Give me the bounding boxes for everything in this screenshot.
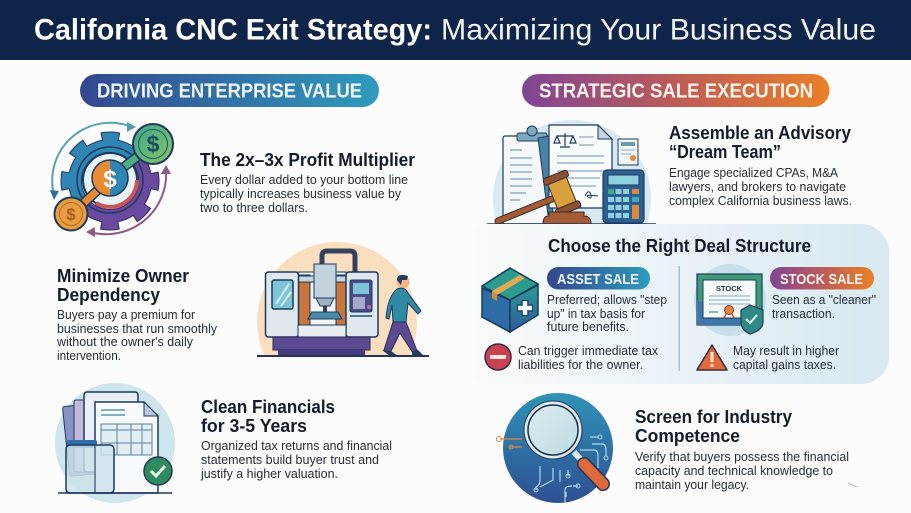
icon: gear with dollar coins: $ bbox=[147, 131, 160, 157]
text block: profit multiplier: The 2x–3x Profit Multiplier bbox=[200, 149, 415, 170]
icon: gear with dollar coins bbox=[50, 122, 173, 237]
icon: magnifying glass over circuit bbox=[496, 393, 613, 503]
text: asset sale drawback bbox=[518, 344, 659, 372]
text block: screen for industry competence: Verify that buyers possess the financial bbox=[635, 450, 849, 464]
text block: profit multiplier bbox=[200, 149, 415, 215]
section heading: driving enterprise value bbox=[80, 74, 379, 107]
text: stock sale drawback bbox=[733, 344, 839, 372]
panel: deal structure bbox=[458, 224, 889, 384]
section heading: strategic sale execution: STRATEGIC SALE EXECUTION bbox=[539, 80, 813, 102]
text block: clean financials bbox=[200, 396, 392, 481]
text: asset sale benefit bbox=[547, 293, 667, 334]
text block: minimize owner dependency: Buyers pay a premium for bbox=[57, 308, 195, 322]
label: stock sale bbox=[770, 267, 874, 290]
text block: clean financials: Clean Financials bbox=[201, 396, 335, 417]
icon: warning triangle bbox=[697, 345, 727, 370]
text block: minimize owner dependency: intervention. bbox=[57, 349, 121, 363]
text block: advisory dream team: “Dream Team” bbox=[669, 141, 781, 162]
text block: clean financials: for 3-5 Years bbox=[201, 415, 307, 436]
icon: minus circle bbox=[485, 344, 511, 370]
heading: choose the right deal structure: Choose the Right Deal Structure bbox=[548, 235, 811, 256]
icon: CNC machine with person walking away bbox=[257, 242, 429, 357]
icon: gear with dollar coins: $ bbox=[66, 205, 76, 224]
subtitle: Maximizing Your Business Value bbox=[441, 14, 876, 46]
title: California CNC Exit Strategy: bbox=[34, 14, 432, 46]
text: stock sale benefit: transaction. bbox=[772, 307, 835, 321]
text block: advisory dream team: Engage specialized CPAs, M&A bbox=[669, 166, 839, 180]
text block: advisory dream team: Assemble an Advisory bbox=[669, 122, 852, 143]
icon: box with plus bbox=[482, 268, 538, 332]
text block: profit multiplier: typically increases business value by bbox=[200, 187, 402, 201]
text block: screen for industry competence: capacity and technical knowledge to bbox=[635, 464, 833, 478]
text: stock sale drawback: capital gains taxes. bbox=[733, 358, 836, 372]
text: asset sale drawback: liabilities for the owner. bbox=[518, 358, 643, 372]
text block: profit multiplier: Every dollar added to your bottom line bbox=[200, 173, 408, 187]
text: stock sale benefit: Seen as a "cleaner" bbox=[772, 293, 876, 307]
text block: screen for industry competence: Screen for Industry bbox=[635, 406, 793, 427]
text block: clean financials: statements build buyer trust and bbox=[201, 453, 379, 467]
icon: financial documents with check mark bbox=[55, 383, 175, 503]
text: asset sale benefit: up" in tax basis for bbox=[547, 307, 645, 321]
text block: clean financials: justify a higher valuation. bbox=[200, 467, 338, 481]
icon: gear with dollar coins: $ bbox=[103, 166, 117, 193]
text block: advisory dream team: complex California business laws. bbox=[669, 194, 852, 208]
text block: screen for industry competence: Competence bbox=[635, 425, 740, 446]
header banner bbox=[0, 0, 911, 60]
text: asset sale benefit: Preferred; allows "step bbox=[547, 293, 667, 307]
label: asset sale: ASSET SALE bbox=[557, 272, 639, 288]
text: asset sale benefit: future benefits. bbox=[547, 320, 629, 334]
text block: screen for industry competence bbox=[635, 406, 849, 492]
text block: clean financials: Organized tax returns and financial bbox=[201, 439, 392, 453]
text block: minimize owner dependency bbox=[56, 265, 218, 363]
text block: profit multiplier: two to three dollars. bbox=[200, 201, 308, 215]
text block: advisory dream team bbox=[669, 122, 852, 208]
text block: minimize owner dependency: Dependency bbox=[57, 284, 161, 305]
label: stock sale: STOCK SALE bbox=[780, 272, 863, 288]
text block: minimize owner dependency: businesses that run smoothly bbox=[57, 322, 218, 336]
icon: legal papers, gavel and calculator bbox=[487, 120, 656, 224]
text: asset sale drawback: Can trigger immediate tax bbox=[518, 344, 659, 358]
icon: stock certificate with shield bbox=[694, 264, 766, 336]
label: asset sale bbox=[547, 267, 650, 290]
text block: minimize owner dependency: Minimize Owner bbox=[57, 265, 189, 286]
text block: minimize owner dependency: without the owner's daily bbox=[56, 335, 194, 349]
text: stock sale benefit bbox=[772, 293, 876, 321]
text block: advisory dream team: lawyers, and brokers to navigate bbox=[669, 180, 846, 194]
text: stock sale drawback: May result in higher bbox=[733, 344, 839, 358]
text block: screen for industry competence: maintain your legacy. bbox=[635, 478, 749, 492]
icon: stock certificate with shield: STOCK bbox=[716, 284, 743, 293]
section heading: driving enterprise value: DRIVING ENTERPRISE VALUE bbox=[97, 80, 362, 102]
section heading: strategic sale execution bbox=[522, 74, 830, 107]
